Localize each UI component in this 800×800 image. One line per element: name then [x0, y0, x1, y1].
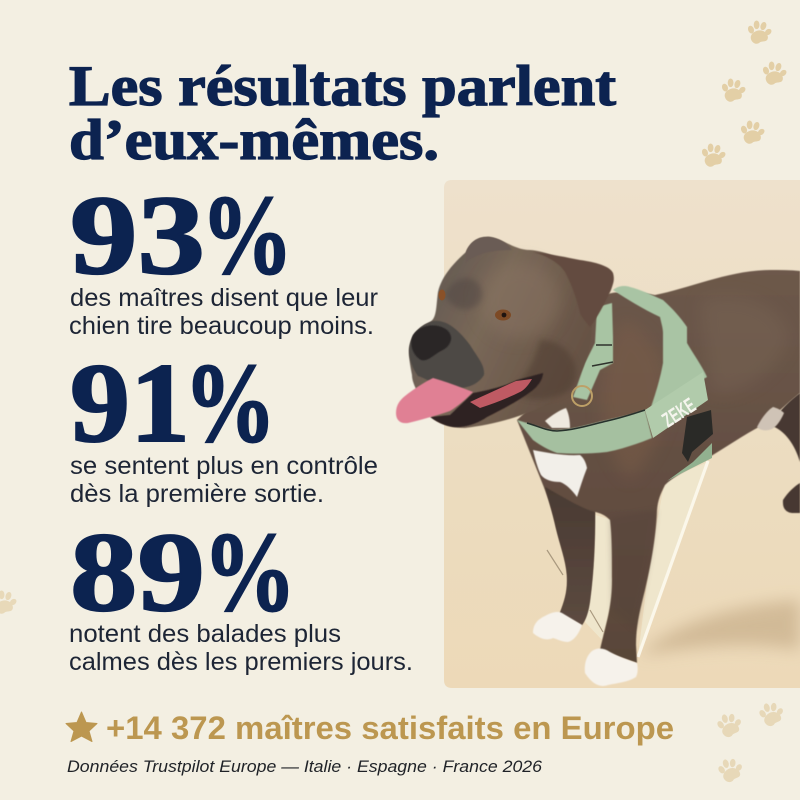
hind leg	[770, 393, 800, 513]
harness back strap	[613, 286, 707, 410]
stat: 91%: dès la première sortie.	[70, 480, 324, 508]
paw prints: bottom right	[714, 699, 787, 784]
stat: 91%: 91	[70, 341, 190, 466]
body	[517, 270, 800, 663]
eyes	[495, 310, 511, 320]
harness side panel with name: ZEKE	[658, 394, 700, 432]
left leg shading	[545, 487, 595, 625]
stat: 89%: 89	[70, 510, 205, 635]
white chest patches	[533, 450, 587, 497]
icon: star	[66, 712, 97, 742]
ear back	[466, 237, 512, 262]
mouth	[430, 373, 543, 427]
stat: 91%	[70, 341, 378, 508]
stat: 89%: %	[203, 510, 296, 635]
forehead highlight	[480, 262, 560, 338]
tongue	[396, 378, 473, 423]
floor shadow	[640, 600, 800, 655]
harness buckle and lower strap	[667, 410, 713, 481]
stat: 93%: 93	[70, 173, 205, 298]
stat: 91%: %	[184, 341, 276, 466]
harness chest strap	[517, 410, 652, 454]
stat: 91%: se sentent plus en contrôle	[70, 452, 378, 480]
stat: 93%: chien tire beaucoup moins.	[69, 312, 374, 340]
stat: 93%: des maîtres disent que leur	[70, 284, 378, 312]
photo background	[444, 180, 800, 688]
nose	[411, 325, 451, 360]
stat: 93%: %	[201, 173, 293, 298]
paws	[533, 612, 638, 686]
stat: 93%	[69, 173, 378, 340]
photo panel: dog in harness	[396, 180, 800, 688]
harness side panel with name	[645, 372, 708, 438]
brow shading	[445, 278, 482, 309]
title	[69, 55, 616, 172]
paw prints: top right	[701, 20, 788, 167]
ear	[533, 252, 614, 327]
collar	[572, 303, 613, 406]
chest and shoulder shading	[601, 320, 667, 480]
paw print: left edge	[0, 590, 18, 614]
social proof line with star: +14 372 maîtres satisfaits en Europe	[106, 710, 674, 746]
stat: 89%: calmes dès les premiers jours.	[69, 648, 413, 676]
title: Les résultats parlent	[69, 55, 616, 118]
stat: 89%: notent des balades plus	[69, 620, 341, 648]
source note: Données Trustpilot Europe — Italie · Espagne · France 2026	[67, 757, 543, 776]
muzzle	[409, 321, 484, 388]
leash gap and white line	[547, 461, 708, 657]
stat: 89%	[69, 510, 413, 676]
head	[396, 237, 614, 428]
title: d’eux-mêmes.	[69, 109, 439, 172]
